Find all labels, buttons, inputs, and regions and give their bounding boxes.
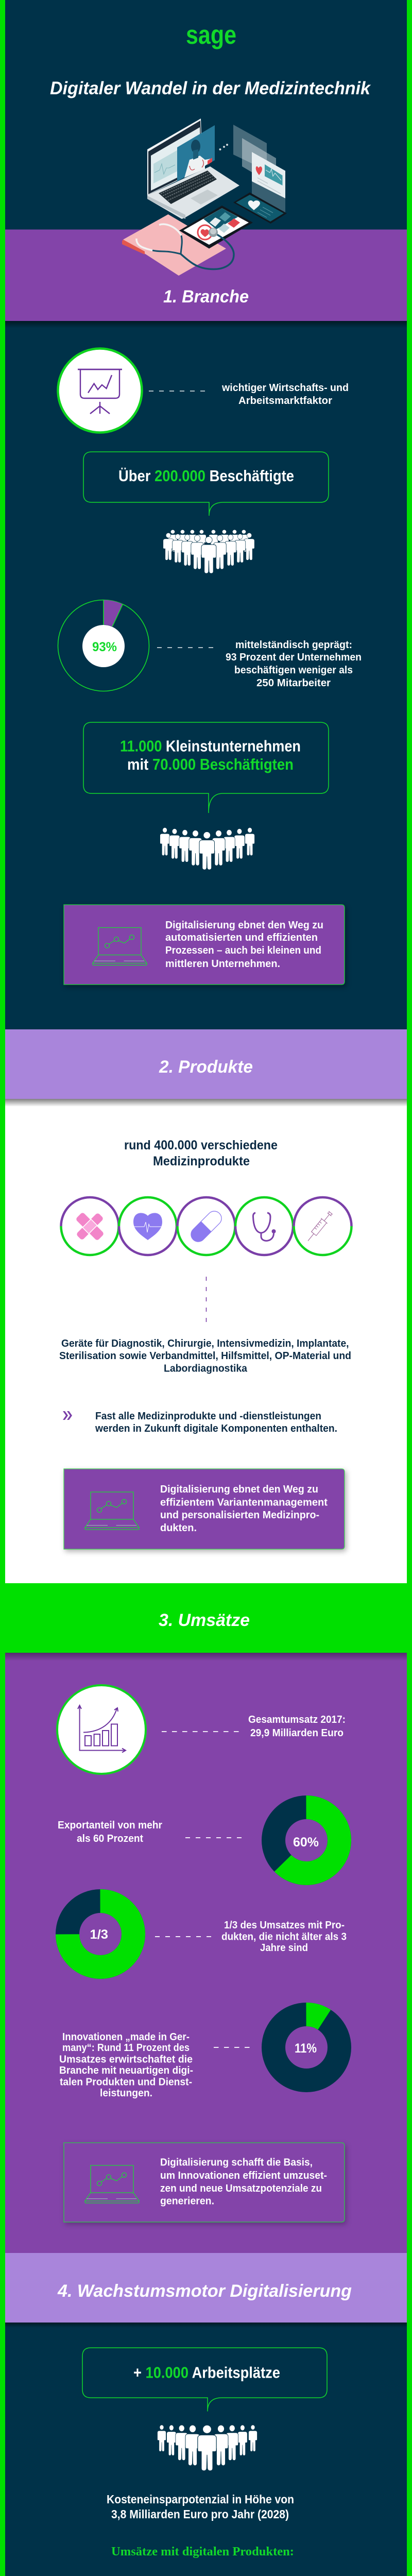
text: new products share: Jahre sind xyxy=(260,1942,308,1954)
panel: digitalisation note 2: und personalisierten Medizinpro- xyxy=(160,1509,319,1521)
panel: digitalisation note 2: dukten. xyxy=(160,1522,197,1534)
text: mittelständisch xyxy=(226,639,362,689)
text: Innovationen made in Germany: leistungen. xyxy=(100,2088,152,2099)
panel: digitalisation note 1: automatisierten und effizienten xyxy=(165,931,318,943)
text: Innovationen made in Germany: Umsatzes erwirtschaftet die xyxy=(59,2054,193,2065)
dashed connector xyxy=(214,2047,250,2048)
icon: crowd of employees xyxy=(163,530,254,573)
text: Innovationen made in Germany: many“: Rund 11 Prozent des xyxy=(62,2042,190,2054)
text: digital components: werden in Zukunft digitale Komponenten enthalten. xyxy=(95,1423,337,1434)
donut chart: 11%: 11% xyxy=(295,2041,317,2056)
text: product categories xyxy=(59,1338,351,1375)
text: Exportanteil xyxy=(58,1820,162,1844)
title: Digitaler Wandel in der Medizintechnik xyxy=(50,78,371,98)
panel: digitalisation note 1 xyxy=(64,905,345,985)
callout: 10.000 Arbeitsplätze: + 10.000 Arbeitsplätze xyxy=(133,2364,280,2381)
text: Gesamtumsatz: Gesamtumsatz 2017: xyxy=(248,1714,346,1725)
background: purple section three xyxy=(0,1653,412,2253)
text: Innovationen made in Germany: talen Produkten und Dienst- xyxy=(60,2076,192,2088)
text: mittelständisch: 93 Prozent der Unternehmen xyxy=(226,651,362,663)
panel: digitalisation note 2: Digitalisierung ebnet den Weg zu xyxy=(160,1483,318,1495)
icon: presentation board xyxy=(58,348,142,433)
text: Kosteneinsparpotenzial: Kosteneinsparpotenzial in Höhe von xyxy=(107,2493,294,2506)
section band: 2. Produkte xyxy=(0,1029,412,1099)
icon: pill xyxy=(177,1197,235,1255)
text: Innovationen made in Germany xyxy=(59,2031,193,2099)
text: 400.000 Medizinprodukte xyxy=(124,1138,278,1168)
text: Exportanteil: Exportanteil von mehr xyxy=(58,1820,162,1831)
icon: large crowd xyxy=(158,2425,257,2471)
background: navy section four and five xyxy=(0,2323,412,2576)
text: Kosteneinsparpotenzial: 3,8 Milliarden Euro pro Jahr (2028) xyxy=(111,2507,289,2521)
dashed connector xyxy=(157,647,214,648)
text: Exportanteil: als 60 Prozent xyxy=(77,1833,143,1844)
background: white section two xyxy=(0,1029,412,1583)
panel: digitalisation note 3: generieren. xyxy=(160,2195,214,2207)
icon: stethoscope xyxy=(235,1197,293,1255)
hero illustration: laptop, tablet, phone, stethoscope xyxy=(122,118,287,276)
panel: digitalisation note 1: Prozessen – auch bei kleinen und xyxy=(165,944,321,956)
background: navy section one xyxy=(0,0,412,1029)
callout: Kleinstunternehmen: 11.000 Kleinstunternehmen xyxy=(120,737,301,755)
text: mittelständisch: 250 Mitarbeiter xyxy=(256,677,331,689)
panel: digitalisation note 3: Digitalisierung schafft die Basis, xyxy=(160,2157,313,2168)
icon row: medical products xyxy=(61,1197,351,1255)
donut chart: 93%: 93% xyxy=(92,640,117,654)
panel: digitalisation note 3: um Innovationen effizient umzuset- xyxy=(160,2170,327,2181)
donut chart: 93% xyxy=(58,600,149,691)
text: Gesamtumsatz xyxy=(248,1714,346,1739)
text: product categories: Labordiagnostika xyxy=(164,1363,248,1375)
icon: small crowd xyxy=(160,827,254,870)
text: mittelständisch: beschäftigen weniger als xyxy=(234,664,353,676)
text: product categories: Geräte für Diagnostik, Chirurgie, Intensivmedizin, Implantate, xyxy=(61,1338,349,1349)
callout: Kleinstunternehmen: mit 70.000 Beschäftigten xyxy=(127,755,294,773)
heading: 3. Umsätze: 3. Umsätze xyxy=(159,1611,250,1630)
icon: plaster xyxy=(61,1197,118,1255)
text: Innovationen made in Germany: Branche mit neuartigen digi- xyxy=(59,2065,193,2076)
donut chart: 60% xyxy=(273,1807,339,1873)
callout: Kleinstunternehmen xyxy=(83,722,329,813)
panel: digitalisation note 1: mittleren Unternehmen. xyxy=(165,958,280,970)
icon: rising bar chart xyxy=(57,1685,146,1774)
text: Kosteneinsparpotenzial xyxy=(107,2493,294,2521)
panel: digitalisation note 3: zen und neue Umsatzpotenziale zu xyxy=(160,2182,322,2194)
text: Innovationen made in Germany: Innovationen „made in Ger- xyxy=(62,2031,190,2043)
text: 400.000 Medizinprodukte: Medizinprodukte xyxy=(153,1154,250,1168)
callout: 200.000 Beschäftigte: Über 200.000 Beschäftigte xyxy=(118,467,294,485)
text: industry factor xyxy=(221,382,349,406)
heading: 1. Branche: 1. Branche xyxy=(163,287,249,307)
donut chart: 11% xyxy=(273,2014,339,2080)
text: new products share xyxy=(221,1920,347,1954)
icon: syringe xyxy=(294,1197,351,1255)
dashed connector xyxy=(155,1936,212,1937)
heading: 2. Produkte: 2. Produkte xyxy=(159,1057,253,1077)
heading: 4. Wachstumsmotor Digitalisierung: 4. Wachstumsmotor Digitalisierung xyxy=(57,2281,352,2301)
text: industry factor: wichtiger Wirtschafts- und xyxy=(221,382,349,394)
text: new products share: 1/3 des Umsatzes mit Pro- xyxy=(224,1920,345,1931)
icon: chevrons xyxy=(63,1411,72,1420)
donut chart: 60%: 60% xyxy=(293,1835,319,1850)
callout: 10.000 Arbeitsplätze xyxy=(82,2348,327,2411)
panel: digitalisation note 1: Digitalisierung ebnet den Weg zu xyxy=(165,919,323,931)
donut chart: 1/3: 1/3 xyxy=(90,1927,108,1942)
panel: digitalisation note 2: effizientem Variantenmanagement xyxy=(160,1496,328,1509)
text: mittelständisch: mittelständisch geprägt: xyxy=(235,639,352,651)
icon: heart with pulse xyxy=(119,1197,177,1255)
section band: 3. Umsätze xyxy=(0,1583,412,1653)
dashed connector xyxy=(185,1837,243,1838)
dashed connector xyxy=(206,1277,207,1323)
panel: digitalisation note 2 xyxy=(64,1469,345,1549)
text: product categories: Sterilisation sowie Verbandmittel, Hilfsmittel, OP-Material und xyxy=(59,1350,351,1362)
text: digital components xyxy=(95,1411,337,1434)
text: new products share: dukten, die nicht älter als 3 xyxy=(221,1931,347,1942)
donut chart: 1/3 xyxy=(67,1901,133,1967)
text: industry factor: Arbeitsmarktfaktor xyxy=(238,395,332,406)
dashed connector xyxy=(149,391,206,392)
text: 400.000 Medizinprodukte: rund 400.000 verschiedene xyxy=(124,1138,278,1153)
logo: sage: sage xyxy=(186,20,236,49)
panel: digitalisation note 3 xyxy=(64,2143,345,2222)
section band: 1. Branche xyxy=(0,230,412,321)
dashed connector xyxy=(162,1731,239,1732)
text: digital components: Fast alle Medizinprodukte und -dienstleistungen xyxy=(95,1411,321,1422)
heading: Umsätze mit digitalen Produkten: Umsätze mit digitalen Produkten: xyxy=(111,2545,294,2558)
text: Gesamtumsatz: 29,9 Milliarden Euro xyxy=(250,1727,344,1739)
section band: 4. Wachstumsmotor xyxy=(0,2253,412,2323)
callout: 200.000 Beschäftigte xyxy=(83,452,329,516)
